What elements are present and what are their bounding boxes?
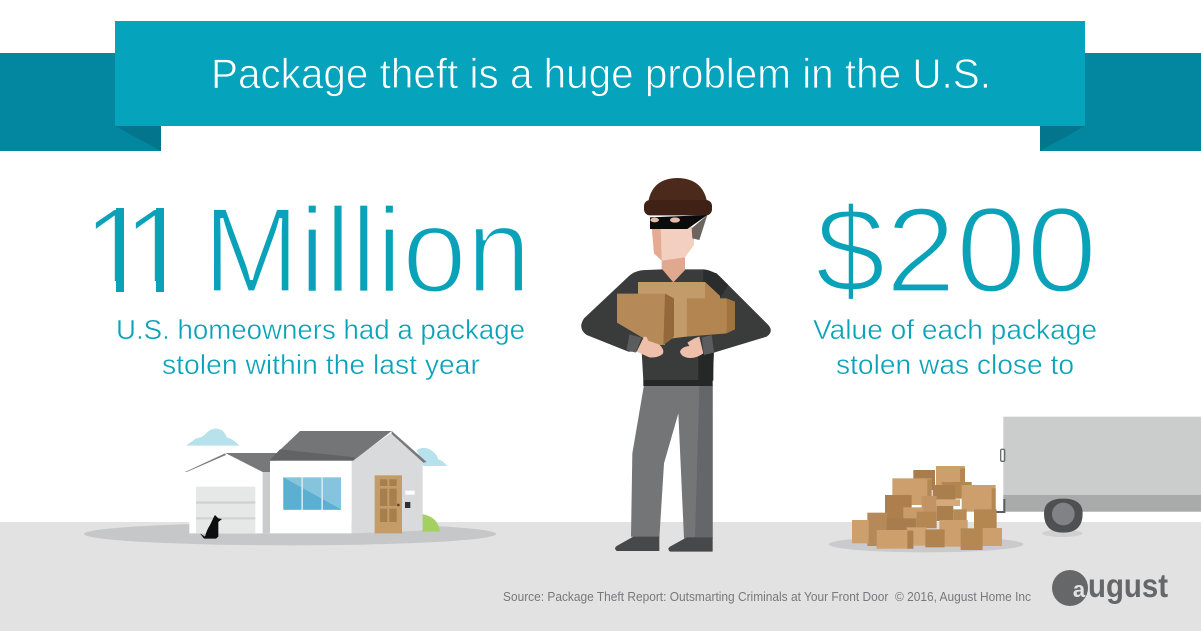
source line: Source: Package Theft Report: Outsmarting Criminals at Your Front Door © 2016, August Home Inc [503,590,1031,604]
bush [422,514,440,532]
icon: thief carrying boxes [581,178,771,552]
title banner [0,21,1201,151]
wheel [1044,499,1083,533]
icon: truck and package pile [829,417,1201,552]
hands [637,337,663,358]
bumper [996,499,1004,512]
garage [189,455,270,533]
neck [662,255,685,282]
boxes [913,470,935,490]
ground [0,522,1201,631]
shoes [615,537,659,551]
number: 11 Million [96,206,522,292]
house number [405,491,415,495]
pile shadow [829,536,1023,552]
mask [650,215,707,229]
description: homeowners: stolen within the last year [162,349,480,380]
face [652,227,694,261]
cloud left [186,429,239,446]
sweater [581,269,771,381]
right statistic [813,182,1105,380]
logo: august: a [1073,577,1086,602]
boxes [638,282,735,345]
description: package value: Value of each package [813,314,1097,345]
lock [405,502,410,508]
cloud right [417,448,447,466]
hair [692,215,707,240]
icon: house with dog [84,429,496,545]
house front [270,461,352,533]
logo: august [1052,567,1168,606]
number: 11 Million: Million [203,182,531,318]
left statistic [96,206,524,380]
number: $200: $200 [815,182,1097,318]
window [283,477,341,510]
description: package value: stolen was close to [836,349,1074,380]
hat [648,178,707,203]
dog [200,515,222,539]
shadow [84,523,496,545]
truck body [1003,417,1201,512]
title: Package theft is a huge problem in the U.S. [211,50,991,97]
roof [269,431,392,461]
cuffs [627,334,642,353]
legs [631,385,713,538]
door [375,475,402,533]
number: 11 Million: 11 [82,182,190,318]
description: homeowners: U.S. homeowners had a package [116,314,525,345]
logo: august: ugust [1088,567,1168,604]
truck shadow [1042,530,1082,537]
